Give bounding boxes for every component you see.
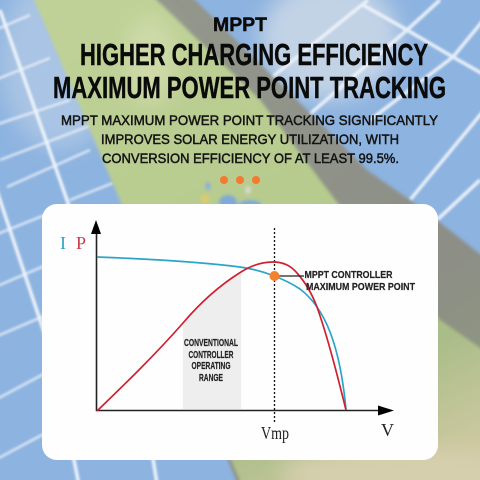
conventional operating range band bbox=[183, 272, 241, 409]
power curve bbox=[97, 262, 346, 411]
axis labels: Vmp bbox=[261, 423, 289, 443]
description text bbox=[61, 112, 439, 166]
range label: CONTROLLER bbox=[188, 350, 234, 361]
panel: chart card bbox=[42, 204, 438, 460]
maximum power point label: MPPT CONTROLLER bbox=[304, 269, 393, 281]
maximum power point label bbox=[304, 269, 415, 293]
description text: IMPROVES SOLAR ENERGY UTILIZATION, WITH bbox=[101, 131, 399, 147]
maximum power point marker bbox=[270, 271, 304, 281]
axis labels: V bbox=[381, 420, 394, 440]
axis labels bbox=[60, 233, 394, 443]
axis labels: I bbox=[60, 233, 66, 253]
range label: CONVENTIONAL bbox=[184, 338, 238, 349]
range label bbox=[184, 338, 238, 384]
vertical axis bbox=[91, 220, 101, 411]
chart: I-V and P-V curves bbox=[60, 220, 415, 443]
maximum power point label: MAXIMUM POWER POINT bbox=[306, 281, 415, 293]
range label: RANGE bbox=[199, 373, 223, 384]
description text: CONVERSION EFFICIENCY OF AT LEAST 99.5%. bbox=[102, 150, 399, 166]
Vmp dotted line bbox=[274, 228, 276, 422]
pagination dots bbox=[220, 176, 260, 184]
small heading: MPPT: MPPT bbox=[213, 14, 267, 36]
description text: MPPT MAXIMUM POWER POINT TRACKING SIGNIFICANTLY bbox=[61, 112, 439, 128]
current curve bbox=[97, 257, 346, 410]
axis labels: P bbox=[76, 233, 86, 253]
horizontal axis bbox=[96, 406, 394, 416]
range label: OPERATING bbox=[192, 361, 231, 372]
